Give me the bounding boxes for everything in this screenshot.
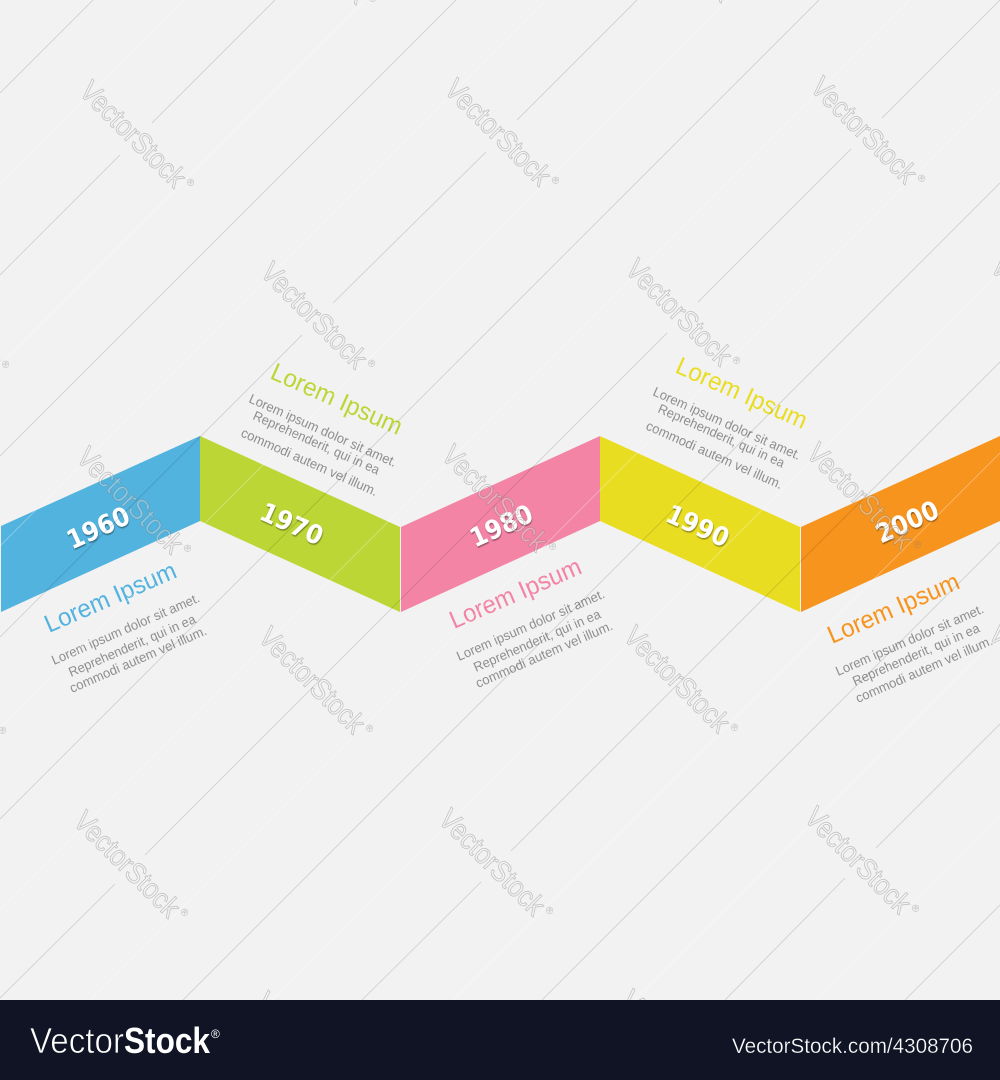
watermark pattern: VectorStock <box>432 803 551 922</box>
year labels <box>62 495 944 556</box>
body: 1960: Lorem ipsum dolor sit amet. <box>49 590 202 668</box>
ribbon segment: 2000 <box>801 436 1000 612</box>
body: 1980: commodi autem vel illum. <box>473 618 615 691</box>
footer image id: VectorStock.com/4308706 <box>732 1035 973 1058</box>
body: 1980: Lorem ipsum dolor sit amet. <box>454 586 607 664</box>
body: 1970: Reprehenderit, qui in ea <box>251 408 383 478</box>
ribbon segment: 1970 <box>200 436 400 612</box>
heading: 1970: Lorem Ipsum <box>267 358 407 441</box>
heading: 2000: Lorem Ipsum <box>823 568 964 650</box>
watermark pattern: VectorStock <box>252 621 371 740</box>
timeline ribbon <box>1 436 1000 612</box>
year: 2000: 2000 <box>871 495 944 550</box>
watermark pattern: VectorStock <box>617 620 736 739</box>
year: 1990: 1990 <box>661 499 734 554</box>
watermark pattern: ® <box>545 540 559 554</box>
block: 1980 text <box>445 553 615 691</box>
block: 1970 text <box>239 358 407 499</box>
ribbon segment: 1980 <box>401 436 600 612</box>
year: 1980: 1980 <box>465 499 538 554</box>
watermark pattern: ® <box>364 357 378 371</box>
heading: 1980: Lorem Ipsum <box>445 553 586 635</box>
body: 2000: Lorem ipsum dolor sit amet. <box>833 601 986 679</box>
watermark pattern: ® <box>548 174 562 188</box>
body: 1970 <box>239 391 399 499</box>
body: 1970: commodi autem vel illum. <box>239 425 380 499</box>
watermark pattern: VectorStock <box>438 73 557 192</box>
body: 1960: commodi autem vel illum. <box>67 623 209 696</box>
watermark pattern: ® <box>542 904 556 918</box>
body: 2000: commodi autem vel illum. <box>853 633 995 706</box>
watermark pattern: VectorStock <box>619 253 738 372</box>
year: 1970: 1970 <box>255 497 328 552</box>
body: 1990: Reprehenderit, qui in ea <box>656 401 788 471</box>
watermark pattern: ® <box>183 176 197 190</box>
watermark pattern: VectorStock <box>435 439 554 558</box>
body: 2000: Reprehenderit, qui in ea <box>850 620 982 689</box>
block: 2000 text <box>823 568 995 706</box>
watermark pattern: ® <box>362 722 376 736</box>
year: 1960: 1960 <box>62 501 135 556</box>
body: 1960: Reprehenderit, qui in ea <box>66 611 198 680</box>
block: 1990 text <box>644 352 812 492</box>
ribbon segment: 1990 <box>600 436 800 612</box>
watermark pattern: VectorStock <box>254 256 373 375</box>
body: 1980: Reprehenderit, qui in ea <box>471 606 603 675</box>
footer logo <box>30 1020 220 1061</box>
watermark pattern: ® <box>727 721 741 735</box>
watermark pattern: VectorStock <box>73 75 192 194</box>
watermark pattern: ® <box>177 906 191 920</box>
watermark pattern: VectorStock <box>804 71 923 190</box>
watermark pattern: ® <box>910 538 924 552</box>
footer logo: Stock <box>124 1020 211 1061</box>
body: 1990: commodi autem vel illum. <box>644 418 785 492</box>
body: 1990: Lorem ipsum dolor sit amet. <box>651 384 803 463</box>
ribbon segment: 1960 <box>1 436 200 612</box>
watermark pattern: VectorStock <box>67 805 186 924</box>
heading: 1990: Lorem Ipsum <box>672 352 812 435</box>
footer logo: Vector <box>30 1020 124 1061</box>
footer bar <box>0 1000 1000 1080</box>
watermark pattern: VectorStock <box>70 441 189 560</box>
watermark pattern: ® <box>908 902 922 916</box>
watermark pattern: VectorStock <box>798 801 917 920</box>
watermark pattern: VectorStock <box>800 437 919 556</box>
block: 1960 text <box>40 557 209 696</box>
watermark pattern: ® <box>914 172 928 186</box>
footer logo: ® <box>211 1027 220 1041</box>
heading: 1960: Lorem Ipsum <box>40 557 181 639</box>
watermark pattern: ® <box>729 354 743 368</box>
body: 1970: Lorem ipsum dolor sit amet. <box>247 391 399 470</box>
watermark pattern: ® <box>180 542 194 556</box>
